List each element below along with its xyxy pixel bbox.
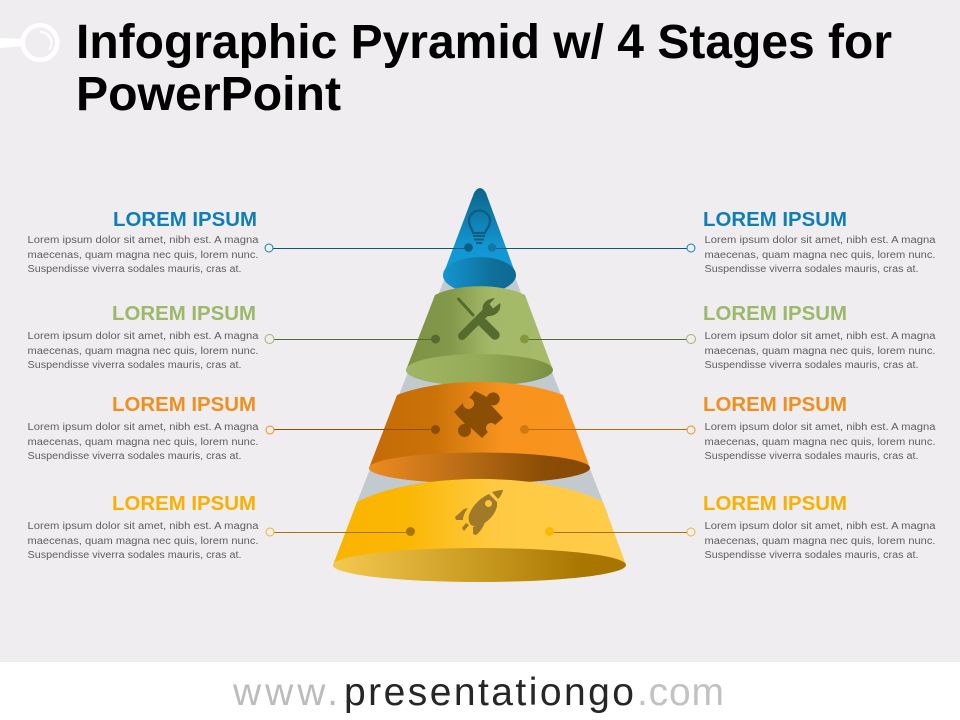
text block: row 3 right: Lorem ipsum dolor sit amet, nibh est. A magna: [704, 422, 936, 433]
text block: row 4 left: Lorem ipsum dolor sit amet, nibh est. A magna: [28, 521, 259, 532]
text block: row 2 right: LOREM IPSUM: [703, 303, 847, 325]
pyramid grey cone: [352, 188, 608, 515]
text block: row 2 right: Lorem ipsum dolor sit amet, nibh est. A magna: [704, 331, 936, 342]
text block: row 1 right: maecenas, quam magna nec quis, lorem nunc.: [704, 250, 936, 261]
text block: row 3 left: Suspendisse viverra sodales mauris, cras at.: [28, 451, 242, 462]
stage 2: green layer: [406, 286, 553, 386]
connector: row 1 left: [265, 243, 473, 252]
text block: row 2 left: maecenas, quam magna nec quis, lorem nunc.: [28, 346, 258, 357]
icon: puzzle piece: [454, 391, 503, 438]
text block: row 3 left: maecenas, quam magna nec quis, lorem nunc.: [28, 437, 258, 448]
text block: row 1 left: Suspendisse viverra sodales mauris, cras at.: [28, 264, 242, 275]
text block: row 3 left: [28, 394, 259, 462]
icon: tools: [458, 298, 500, 336]
text block: row 2 left: LOREM IPSUM: [112, 303, 256, 325]
connector: row 3 right: [520, 425, 695, 434]
text block: row 1 left: [28, 209, 259, 275]
text block: row 2 left: [28, 303, 259, 371]
text block: row 3 right: Suspendisse viverra sodales mauris, cras at.: [704, 451, 918, 462]
connector: row 2 right: [520, 334, 696, 344]
text block: row 3 right: [703, 394, 936, 462]
connector: row 4 right: [545, 527, 695, 536]
text block: row 4 right: LOREM IPSUM: [703, 493, 847, 515]
footer url: www.: [232, 671, 338, 714]
connector: row 4 left: [266, 527, 415, 536]
text block: row 4 right: Lorem ipsum dolor sit amet, nibh est. A magna: [704, 521, 936, 532]
footer url: .com: [637, 671, 724, 714]
text block: row 1 right: Lorem ipsum dolor sit amet, nibh est. A magna: [704, 235, 936, 246]
text block: row 3 right: LOREM IPSUM: [703, 394, 847, 416]
text block: row 4 right: maecenas, quam magna nec quis, lorem nunc.: [704, 536, 936, 547]
stage 3: orange layer: [369, 382, 590, 484]
pyramid: [333, 188, 626, 582]
text block: row 1 right: Suspendisse viverra sodales mauris, cras at.: [704, 264, 918, 275]
text block: row 4 left: maecenas, quam magna nec quis, lorem nunc.: [28, 536, 258, 547]
icon: title ring pointer: [0, 25, 57, 60]
text block: row 2 left: Lorem ipsum dolor sit amet, nibh est. A magna: [28, 331, 259, 342]
footer url: [232, 671, 724, 714]
footer url: presentationgo: [344, 671, 634, 714]
text block: row 4 left: LOREM IPSUM: [112, 493, 256, 515]
text block: row 4 left: [28, 493, 259, 561]
icon: rocket: [455, 490, 503, 535]
text block: row 3 left: Lorem ipsum dolor sit amet, nibh est. A magna: [28, 422, 259, 433]
text block: row 2 right: [703, 303, 936, 371]
title: [76, 16, 892, 121]
text block: row 4 right: [703, 493, 936, 561]
connector: row 1 right: [488, 243, 695, 252]
title: Infographic Pyramid w/ 4 Stages for: [76, 16, 892, 69]
icon: light bulb: [469, 210, 490, 243]
text block: row 2 left: Suspendisse viverra sodales mauris, cras at.: [28, 360, 242, 371]
connector: row 2 left: [265, 334, 440, 344]
text block: row 2 right: Suspendisse viverra sodales mauris, cras at.: [704, 360, 918, 371]
text block: row 1 right: [703, 209, 936, 275]
text block: row 1 left: maecenas, quam magna nec quis, lorem nunc.: [28, 250, 258, 261]
stage 4: yellow layer: [333, 479, 626, 582]
text block: row 4 left: Suspendisse viverra sodales mauris, cras at.: [28, 550, 242, 561]
text block: row 1 left: Lorem ipsum dolor sit amet, nibh est. A magna: [28, 235, 259, 246]
title: PowerPoint: [76, 68, 341, 121]
text block: row 1 left: LOREM IPSUM: [113, 209, 257, 231]
text block: row 3 left: LOREM IPSUM: [112, 394, 256, 416]
text block: row 4 right: Suspendisse viverra sodales mauris, cras at.: [704, 550, 918, 561]
connector: row 3 left: [266, 425, 440, 434]
text block: row 1 right: LOREM IPSUM: [703, 209, 847, 231]
footer band: [0, 662, 960, 720]
text block: row 3 right: maecenas, quam magna nec quis, lorem nunc.: [704, 437, 936, 448]
text block: row 2 right: maecenas, quam magna nec quis, lorem nunc.: [704, 346, 936, 357]
stage 1: blue layer: [443, 188, 516, 293]
